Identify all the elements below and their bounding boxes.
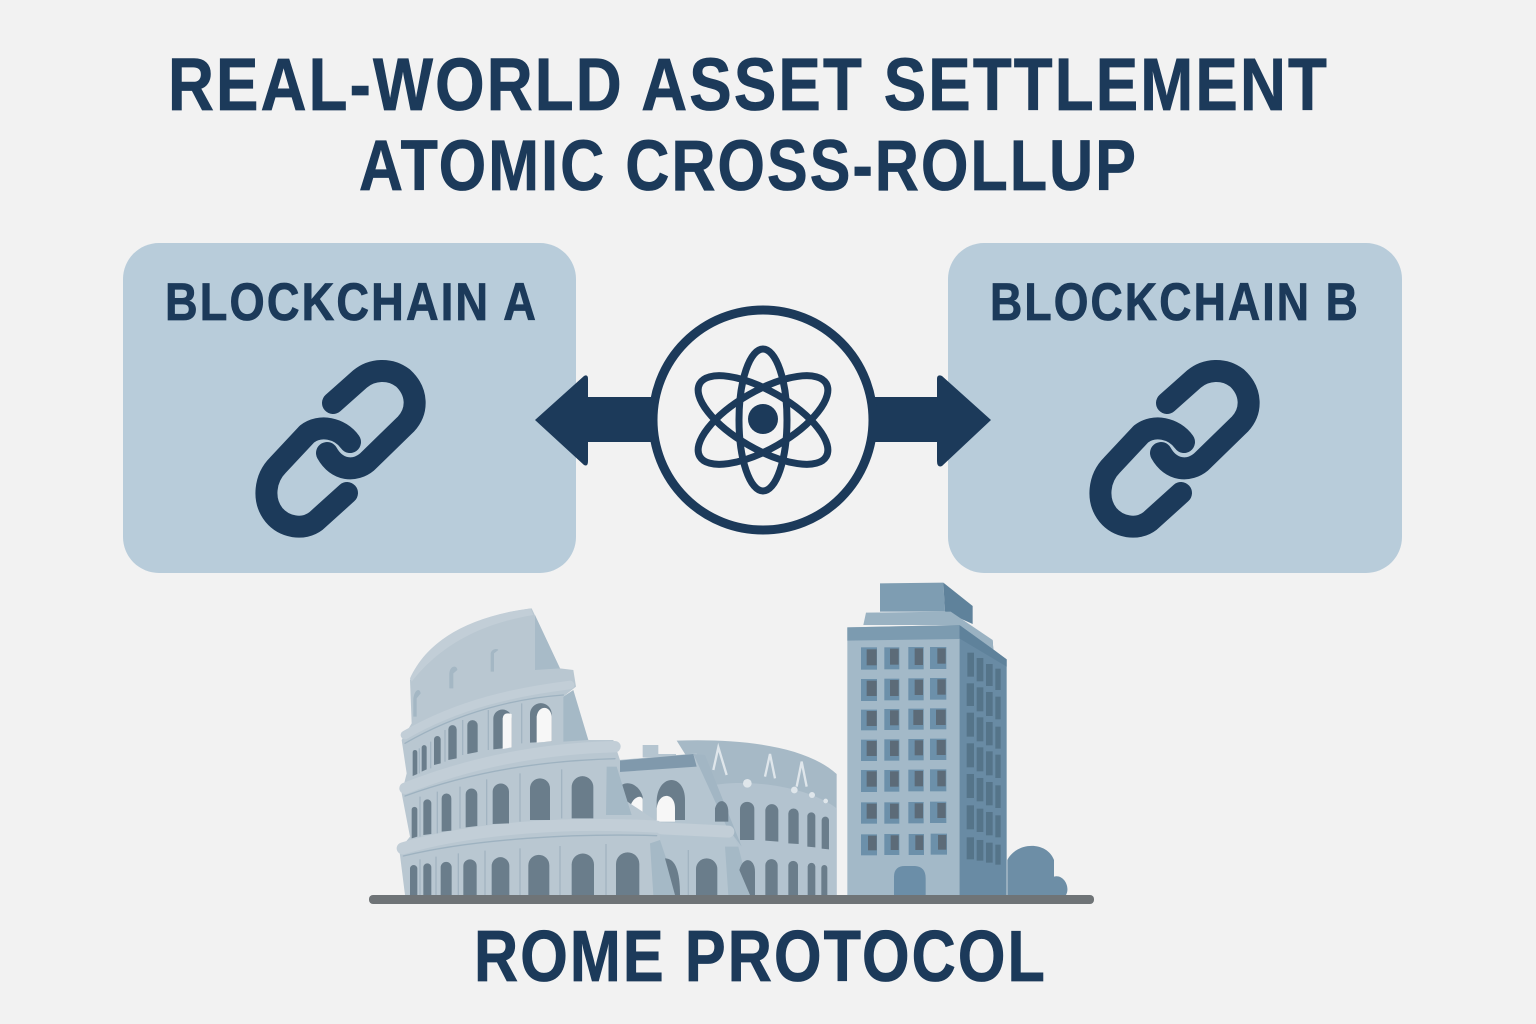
main front wall [399, 608, 678, 895]
middle ruined section [617, 753, 752, 895]
footer label: Rome Protocol: ROME PROTOCOL [474, 917, 1047, 997]
title: REAL-WORLD ASSET SETTLEMENT [168, 43, 1329, 126]
upper tier [863, 612, 993, 649]
title: ATOMIC CROSS-ROLLUP [359, 127, 1138, 206]
arches [410, 703, 829, 895]
icon: atom in circle [653, 310, 873, 530]
roof box [880, 583, 945, 612]
top wall shading and windows [410, 608, 533, 682]
panel: blockchain A [123, 243, 576, 573]
heading: blockchain A: BLOCKCHAIN A [165, 273, 538, 332]
panel: blockchain B [948, 243, 1402, 573]
ground line [369, 895, 1094, 904]
bush [1007, 846, 1067, 895]
icon: chain link A [266, 371, 415, 527]
title [168, 43, 1329, 206]
icon: chain link B [1100, 371, 1249, 527]
door [894, 866, 926, 895]
side windows [967, 653, 1001, 865]
back wall [677, 740, 837, 895]
pilasters [419, 703, 688, 895]
arrow: right [870, 375, 991, 466]
side face [959, 625, 1007, 895]
front windows [861, 647, 947, 855]
front face [847, 625, 959, 895]
illustration: colosseum [399, 608, 837, 895]
heading: blockchain B: BLOCKCHAIN B [990, 273, 1360, 332]
buttresses [563, 690, 751, 895]
illustration: office building [847, 583, 1067, 895]
cornice bands [403, 685, 728, 856]
arrow: left [535, 375, 655, 466]
